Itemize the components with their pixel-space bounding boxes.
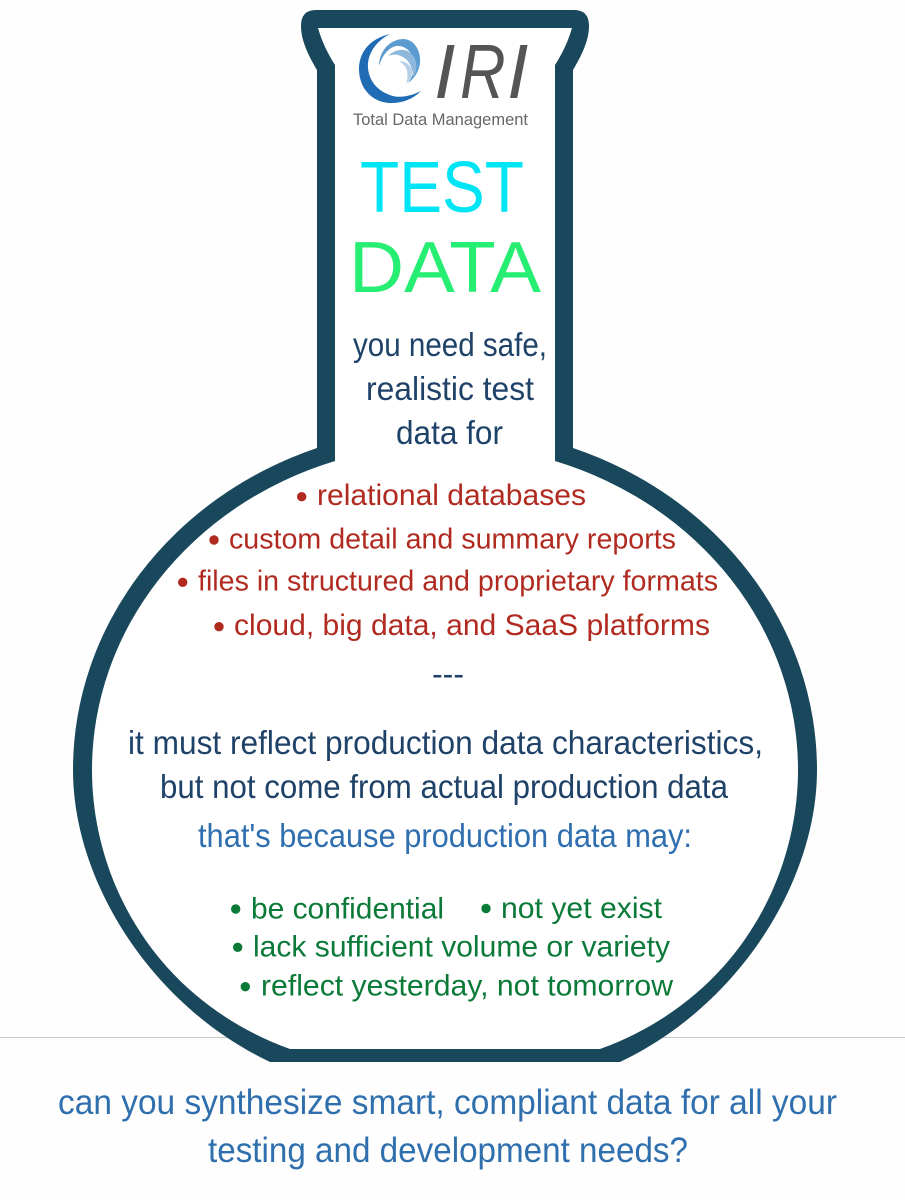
list: data targets: files in structured and proprietary formats bbox=[198, 566, 718, 598]
production data statement: it must reflect production data characteristics, bbox=[128, 724, 763, 761]
flask outline bbox=[73, 10, 817, 1062]
intro text: data for bbox=[396, 414, 503, 451]
logo wordmark: I bbox=[507, 29, 528, 115]
reason lead-in: that's because production data may: bbox=[198, 817, 692, 854]
list: production data risks: lack sufficient volume or variety bbox=[253, 931, 670, 964]
intro text bbox=[353, 326, 547, 451]
heading: DATA: DATA bbox=[349, 228, 541, 308]
list: data targets bbox=[178, 479, 718, 642]
intro text: realistic test bbox=[366, 370, 534, 407]
heading: TEST: TEST bbox=[360, 148, 524, 228]
separator dashes: --- bbox=[432, 656, 464, 692]
logo wordmark: I bbox=[434, 29, 455, 115]
IRI logo bbox=[353, 28, 528, 129]
closing question: testing and development needs? bbox=[208, 1131, 688, 1170]
logo wordmark bbox=[434, 28, 528, 115]
list: production data risks: be confidential bbox=[251, 892, 444, 925]
closing question bbox=[58, 1083, 837, 1170]
list: production data risks: not yet exist bbox=[501, 892, 663, 925]
closing question: can you synthesize smart, compliant data for all your bbox=[58, 1083, 837, 1122]
list: production data risks: reflect yesterday, not tomorrow bbox=[261, 970, 673, 1002]
production data statement bbox=[128, 724, 763, 805]
list: data targets: custom detail and summary reports bbox=[229, 524, 676, 556]
icon: logo swirl bbox=[359, 34, 421, 103]
production data statement: but not come from actual production data bbox=[160, 768, 729, 805]
list: production data risks bbox=[231, 892, 673, 1002]
list: data targets: cloud, big data, and SaaS platforms bbox=[234, 609, 710, 642]
logo wordmark: R bbox=[460, 28, 506, 114]
logo tagline: Total Data Management bbox=[353, 110, 528, 129]
intro text: you need safe, bbox=[353, 326, 547, 363]
list: data targets: relational databases bbox=[317, 479, 586, 512]
